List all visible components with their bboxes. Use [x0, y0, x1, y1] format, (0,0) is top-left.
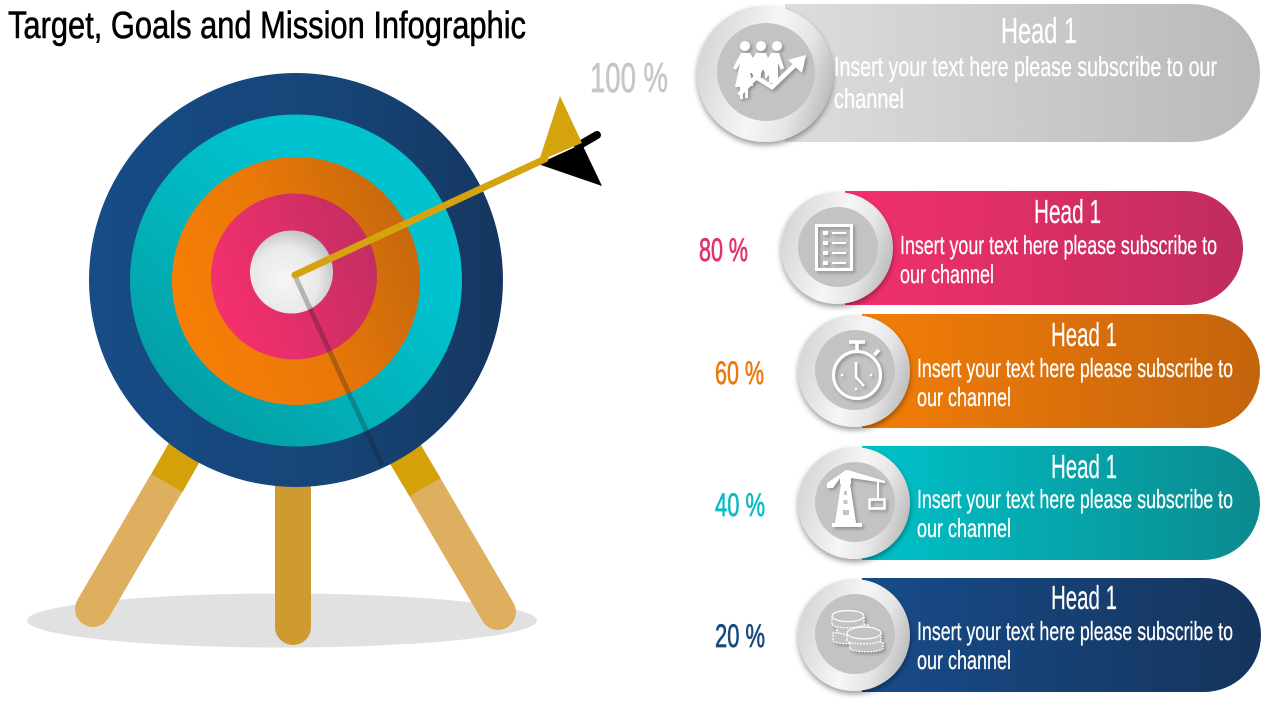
- badge: [798, 579, 910, 691]
- pill: [845, 191, 1243, 305]
- left leg: [93, 441, 201, 609]
- head: Head 1: [1034, 193, 1101, 230]
- arrow black fin: [538, 144, 602, 186]
- teal ring: [130, 114, 462, 446]
- arrow gold fin: [539, 96, 582, 161]
- head: Head 1: [1051, 448, 1117, 485]
- panel: orange item: [798, 314, 1260, 428]
- panel: navy item: [798, 578, 1261, 692]
- white bullseye: [250, 230, 333, 314]
- label 60 percent: 60 %: [715, 355, 764, 391]
- body text: [834, 51, 1217, 114]
- target: [89, 73, 503, 487]
- label 20 percent: 20 %: [715, 618, 765, 654]
- navy ring: [89, 73, 503, 487]
- label 100 percent: 100 %: [590, 54, 668, 101]
- badge: [798, 447, 910, 559]
- pill: [862, 446, 1260, 560]
- panel: pink item: [781, 191, 1243, 305]
- icon: people and rising arrow: [733, 41, 806, 99]
- body text: channel: [834, 83, 904, 114]
- orange ring: [172, 157, 420, 405]
- pill: [862, 578, 1261, 692]
- body text: our channel: [917, 513, 1011, 543]
- ground shadow: [27, 594, 537, 648]
- panel: gray item: [697, 4, 1260, 142]
- head: Head 1: [1051, 316, 1117, 353]
- tripod legs: [93, 441, 498, 627]
- arrow shaft: [295, 159, 545, 275]
- icon: checklist: [816, 226, 852, 270]
- pill: [862, 314, 1260, 428]
- icon: construction crane: [827, 470, 885, 527]
- badge: [798, 315, 910, 427]
- pink ring: [211, 194, 377, 360]
- body text: [917, 616, 1233, 675]
- body text: our channel: [900, 259, 994, 289]
- arrow tail: [578, 135, 597, 146]
- icon: stopwatch: [834, 342, 880, 398]
- right leg: [387, 441, 498, 612]
- head: Head 1: [1001, 10, 1077, 51]
- body text: [900, 230, 1217, 289]
- body text: our channel: [917, 382, 1011, 412]
- pill: [785, 4, 1260, 142]
- badge: [697, 6, 833, 142]
- arrow: [295, 96, 602, 275]
- badge: [781, 192, 893, 304]
- centre leg: [275, 480, 311, 627]
- head: Head 1: [1051, 579, 1117, 616]
- label 40 percent: 40 %: [715, 487, 765, 523]
- arrow shadow: [295, 276, 382, 465]
- title: Target, Goals and Mission Infographic: [8, 5, 526, 47]
- label 80 percent: 80 %: [699, 232, 748, 268]
- panel: teal item: [798, 446, 1260, 560]
- body text: [917, 353, 1233, 412]
- body text: [917, 484, 1233, 543]
- icon: coin stacks: [832, 610, 883, 652]
- body text: our channel: [917, 645, 1011, 675]
